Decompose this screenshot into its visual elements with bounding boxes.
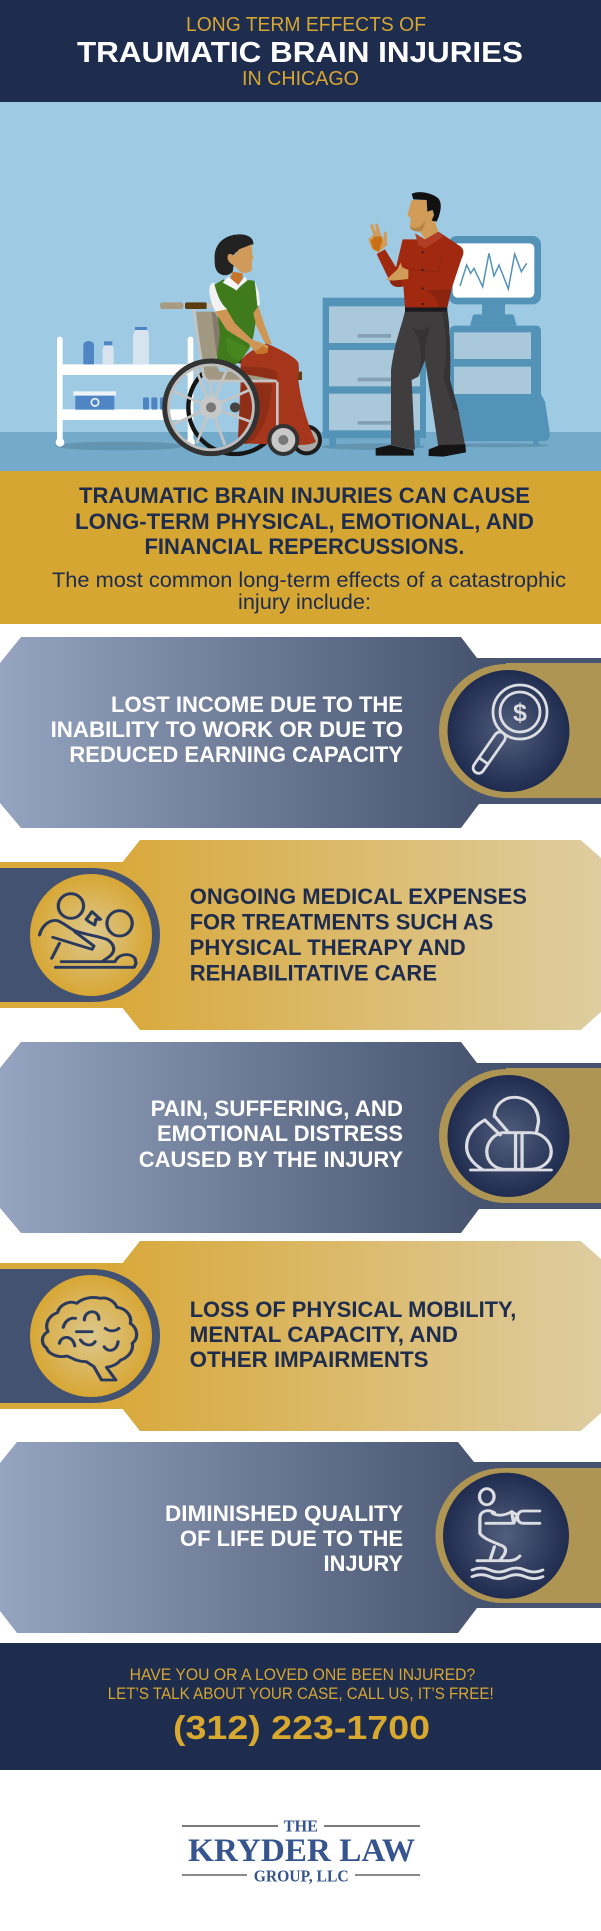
text: lost income: REDUCED EARNING CAPACITY [69, 742, 403, 767]
text: pain and suffering: EMOTIONAL DISTRESS [157, 1121, 403, 1146]
text: lost income: LOST INCOME DUE TO THE [111, 692, 403, 717]
call to action text [108, 1666, 494, 1703]
illustration: medical cart [55, 327, 195, 450]
text: quality of life: INJURY [324, 1551, 403, 1576]
call to action text: HAVE YOU OR A LOVED ONE BEEN INJURED? [130, 1666, 475, 1684]
text: pain and suffering: CAUSED BY THE INJURY [139, 1147, 403, 1172]
text: loss of mobility: LOSS OF PHYSICAL MOBILITY, [190, 1297, 516, 1322]
intro heading [75, 483, 534, 559]
intro heading: TRAUMATIC BRAIN INJURIES CAN CAUSE [79, 483, 530, 508]
text: lost income: INABILITY TO WORK OR DUE TO [51, 717, 403, 742]
illustration: woman in wheelchair [160, 234, 320, 454]
intro subtext: The most common long-term effects of a catastrophic [52, 569, 566, 592]
panel: quality of life [0, 1442, 601, 1633]
text: loss of mobility: OTHER IMPAIRMENTS [190, 1347, 428, 1372]
logo: Kryder Law Group: KRYDER LAW [188, 1833, 415, 1869]
illustration: clinic scene [0, 102, 601, 471]
text: medical expenses: ONGOING MEDICAL EXPENSES [190, 884, 527, 909]
panel: lost income [0, 637, 601, 828]
text: quality of life [165, 1501, 403, 1576]
intro heading: LONG-TERM PHYSICAL, EMOTIONAL, AND [75, 509, 534, 534]
icon: water skier [472, 1489, 543, 1579]
text: pain and suffering: PAIN, SUFFERING, AND [151, 1096, 403, 1121]
call to action text: LET’S TALK ABOUT YOUR CASE, CALL US, IT’S FREE! [108, 1685, 494, 1703]
icon: pills [467, 1097, 551, 1170]
text: quality of life: DIMINISHED QUALITY [165, 1501, 403, 1526]
intro subtext [52, 569, 566, 614]
illustration: drawer cabinet and monitor [322, 236, 550, 450]
text: loss of mobility: MENTAL CAPACITY, AND [190, 1322, 458, 1347]
text: loss of mobility [190, 1297, 516, 1372]
panel: loss of mobility [0, 1241, 601, 1431]
logo: Kryder Law Group: GROUP, LLC [254, 1866, 349, 1886]
text: medical expenses: REHABILITATIVE CARE [190, 960, 437, 986]
title: location: IN CHICAGO [242, 68, 359, 90]
icon: physical therapy [39, 894, 136, 967]
title: main: TRAUMATIC BRAIN INJURIES [77, 37, 523, 69]
text: medical expenses: FOR TREATMENTS SUCH AS [190, 910, 493, 934]
phone number: (312) 223-1700 [173, 1709, 430, 1746]
text: pain and suffering [139, 1096, 403, 1172]
text: medical expenses: PHYSICAL THERAPY AND [190, 935, 466, 960]
illustration: man in red shirt [368, 192, 466, 457]
icon: magnifying glass with dollar [471, 685, 547, 775]
text: lost income [51, 692, 403, 767]
call to action footer [0, 1643, 601, 1770]
intro panel [0, 471, 601, 624]
icon: magnifying glass with dollar: $ [513, 699, 527, 727]
logo: Kryder Law Group: THE [284, 1816, 318, 1836]
title: kicker: LONG TERM EFFECTS OF [186, 14, 426, 36]
panel: pain and suffering [0, 1042, 601, 1233]
intro heading: FINANCIAL REPERCUSSIONS. [144, 534, 464, 559]
header banner [0, 0, 601, 102]
panel: medical expenses [0, 840, 601, 1030]
text: medical expenses [190, 884, 527, 986]
intro subtext: injury include: [238, 591, 371, 614]
logo: Kryder Law Group [182, 1816, 420, 1886]
icon: brain [42, 1297, 137, 1380]
text: quality of life: OF LIFE DUE TO THE [180, 1526, 403, 1551]
